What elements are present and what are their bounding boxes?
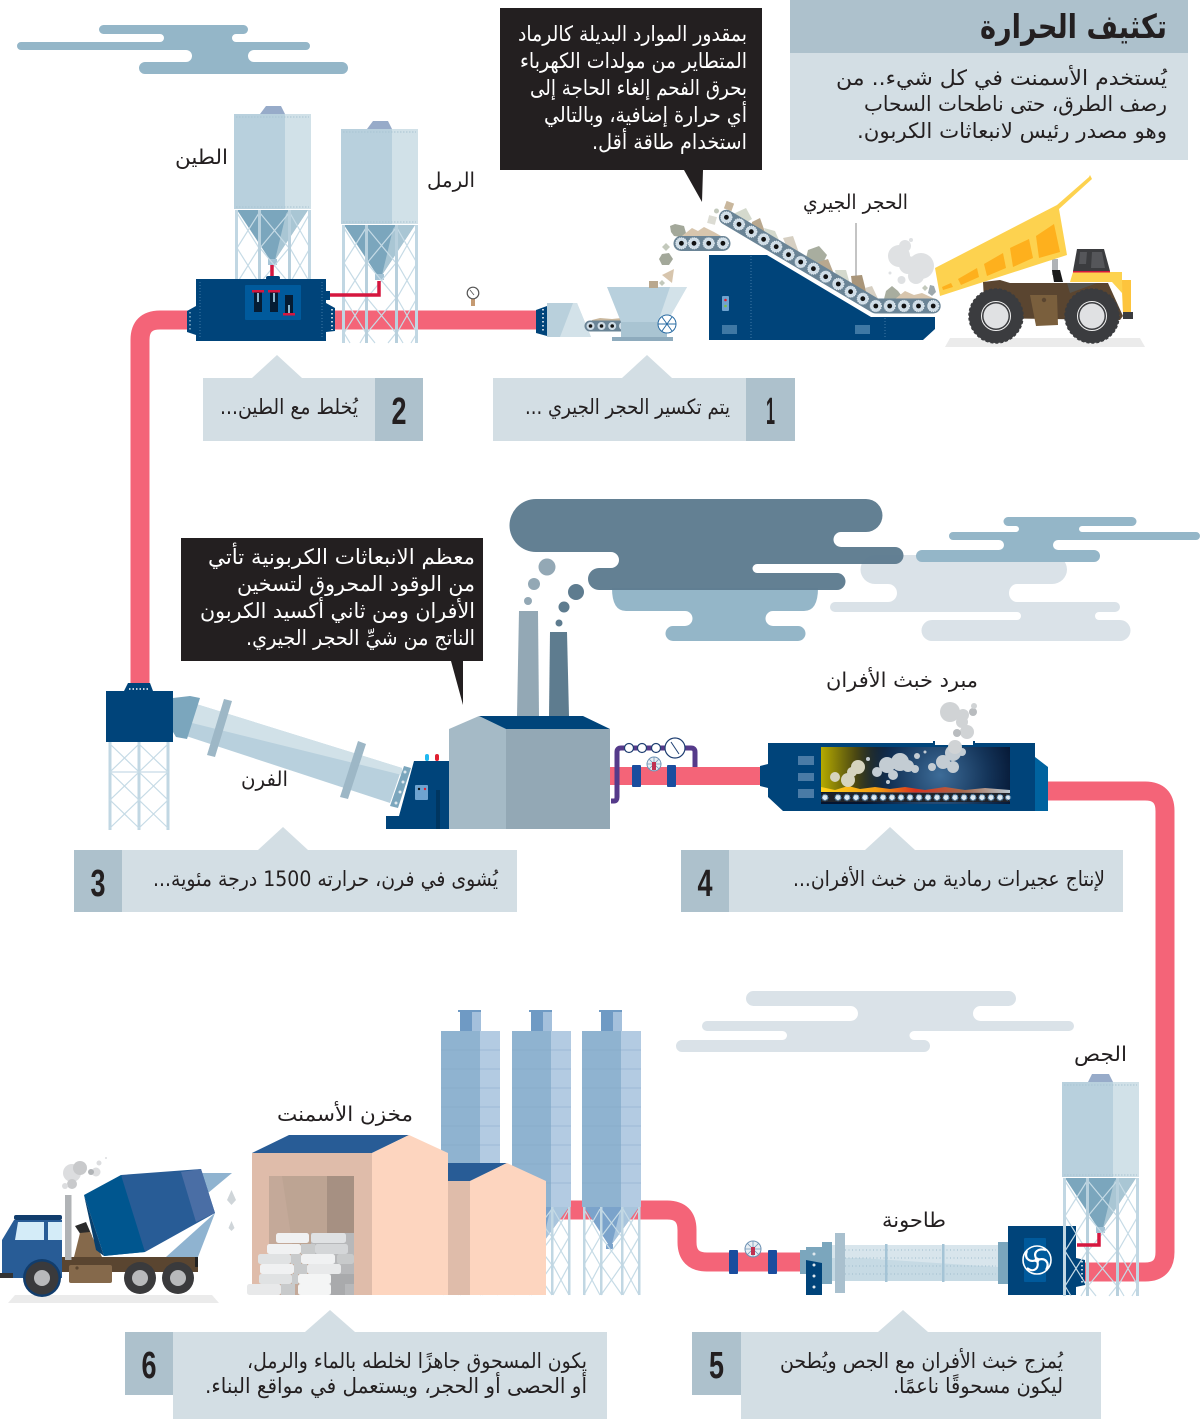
label: cement warehouse: مخزن الأسمنت [277,1101,413,1126]
intro text: وهو مصدر رئيس لانبعاثات الكربون. [857,119,1167,143]
cloud: dark smoke [510,499,904,590]
pipe: top [140,320,540,690]
storage silos [441,1010,641,1295]
step 1: 1 [766,391,775,433]
valve assembly [611,738,695,801]
conveyor: upper short [670,224,729,249]
callout: emissions: من الوقود المحروق لتسخين [237,572,475,596]
cloud: blue, upper right [916,517,1200,562]
intro text: يُستخدم الأسمنت في كل شيء.. من [836,65,1168,90]
cloud: lower [676,991,1074,1052]
ground shadow: mixer truck [8,1295,219,1303]
step 5: 5 [709,1345,724,1387]
burner [386,754,449,829]
gauge [467,287,479,306]
step 6: أو الحصى أو الحجر، ويستعمل في مواقع البناء. [205,1372,587,1398]
callout: alternative resources: أي حرارة إضافية، وبالتالي [544,101,747,128]
step 6: 6 [142,1345,156,1387]
label: sand: الرمل [427,168,475,192]
hopper [607,287,687,341]
pipe: right long [1048,791,1165,1272]
step 1 [493,355,795,441]
callout: emissions: الناتج من شيِّ الحجر الجيري. [246,626,475,650]
step 4: لإنتاج عجيرات رمادية من خبث الأفران... [793,866,1105,892]
step 5: يُمزج خبث الأفران مع الجص ويُطحن [780,1348,1064,1374]
step 6 [125,1310,607,1419]
red feed pipe: gypsum [1077,1233,1099,1245]
chimneys [517,611,569,716]
callout: alternative resources: بمقدور الموارد البديلة كالرماد [518,22,747,46]
dust [888,238,934,284]
dump truck [935,175,1133,343]
kiln [173,696,402,803]
silo cap: gypsum [1088,1074,1113,1082]
step 4 [681,827,1123,912]
callout: emissions: معظم الانبعاثات الكربونية تأتي [208,542,475,570]
step 2 [203,355,423,441]
label: gypsum: الجص [1074,1042,1127,1066]
conveyor machine [709,255,935,340]
callout: alternative resources: بحرق الفحم إلغاء الحاجة إلى [530,76,747,101]
label: limestone [803,190,908,276]
valve: lower [729,1241,777,1274]
callout: alternative resources: المتطاير من مولدات الكهرباء [520,49,747,73]
factory [449,716,610,829]
ground shadow: dump truck [945,338,1145,347]
pipe: factory to cooler [610,767,762,785]
silo: clay [234,114,311,328]
falling rocks [649,208,719,288]
step 3: يُشوى في فرن، حرارته 1500 درجة مئوية... [153,867,499,891]
mill [800,1233,1008,1295]
cloud: pale, right [830,555,1130,641]
step 4: 4 [698,863,712,905]
step 5 [692,1310,1101,1419]
small conveyor: crusher feed [586,318,627,330]
callout: emissions [181,538,483,705]
crusher [536,303,591,337]
silo cap: clay [260,106,285,114]
cloud: blue, under smoke [612,588,818,641]
silo: gypsum [1062,1082,1139,1296]
silo: sand [341,129,418,343]
silo cap: sand [367,121,392,129]
label: kiln: الفرن [241,767,288,791]
truck exhaust smoke [62,1157,107,1189]
red feed pipes [272,265,379,295]
intro text: رصف الطرق، حتى ناطحات السحاب [864,92,1167,116]
step 1: يتم تكسير الحجر الجيري ... [525,395,730,420]
clinker cooler [760,741,1048,811]
pipe: mill to silos [500,1210,806,1262]
step 6: يكون المسحوق جاهزًا لخلطه بالماء والرمل، [247,1349,587,1373]
step 2: يُخلط مع الطين... [220,395,359,419]
label: limestone: الحجر الجيري [803,190,908,214]
cooler exhaust smoke [940,702,977,754]
step 3: 3 [90,863,106,905]
label: mill: طاحونة [882,1208,946,1232]
callout: emissions: الأفران ومن ثاني أكسيد الكربون [200,597,475,623]
mixer [187,276,335,341]
callout: alternative resources [500,8,762,202]
water drops [227,1190,236,1231]
step 2: 2 [392,391,406,433]
panel: heat intensification [790,0,1188,160]
left tower [106,683,173,830]
step 3 [74,827,517,912]
cloud: top left [17,25,348,74]
label: clay: الطين [175,145,228,169]
intro text [836,65,1168,143]
smoke puffs [524,558,584,626]
conveyor belt [721,212,939,312]
concrete mixer truck [0,1169,232,1297]
fan box [1008,1226,1085,1295]
cement bags [247,1233,354,1295]
limestone pile on conveyor [724,201,936,303]
label: clinker cooler: مبرد خبث الأفران [826,667,978,692]
callout: alternative resources: استخدام طاقة أقل. [592,128,747,154]
cement warehouse [247,1135,546,1295]
step 5: ليكون مسحوقًا ناعمًا. [893,1373,1063,1398]
